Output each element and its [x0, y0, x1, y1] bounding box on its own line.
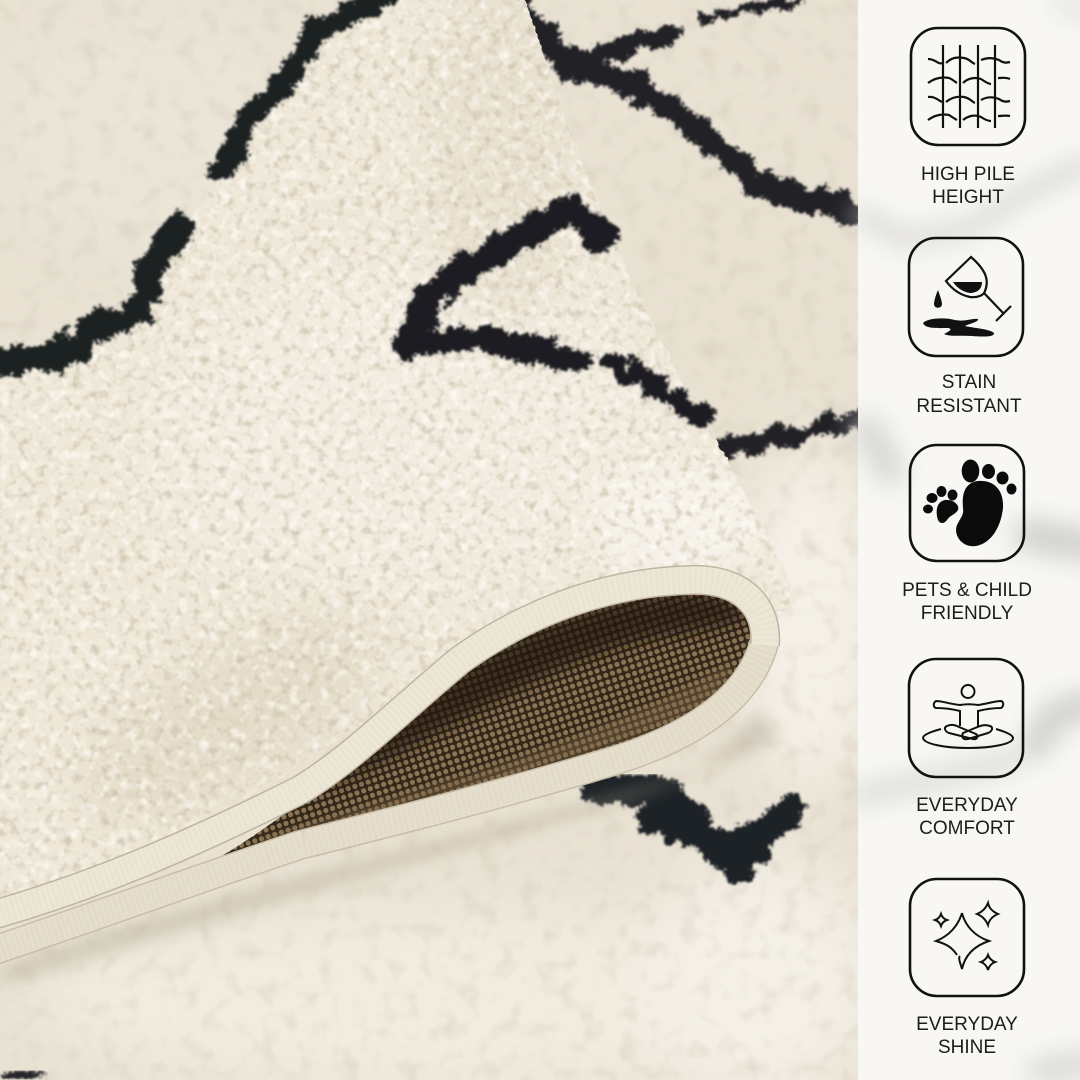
- feature: stain resistant: [909, 238, 1023, 417]
- rug floor background: [0, 0, 858, 1080]
- rug binding edge: [0, 580, 765, 953]
- icon: spilled wine glass: [909, 238, 1023, 356]
- label: everyday comfort: EVERYDAY: [916, 795, 1018, 816]
- flap pattern: curved mark: [404, 210, 704, 420]
- feature: everyday comfort: [909, 659, 1023, 839]
- icon: sparkles: [910, 879, 1024, 996]
- icon: paw and foot prints: [910, 445, 1024, 561]
- rug underside: [215, 585, 754, 860]
- label: high pile height: HEIGHT: [932, 187, 1004, 208]
- floor pile texture: [0, 0, 858, 1080]
- lower binding band: [0, 640, 765, 953]
- label: everyday shine: EVERYDAY: [916, 1014, 1018, 1035]
- label: pets and child friendly: PETS & CHILD: [902, 580, 1032, 601]
- label: everyday comfort: COMFORT: [919, 818, 1015, 839]
- underside inner shadow: [300, 592, 750, 800]
- floor pattern: bottom left mark: [5, 1072, 45, 1078]
- label: stain resistant: RESISTANT: [916, 396, 1022, 417]
- rug flap with shag pile: [0, 0, 800, 930]
- floor pattern: top right dark line: [525, 0, 860, 448]
- label: high pile height: HIGH PILE: [921, 164, 1015, 185]
- feature: high pile height: [911, 28, 1025, 208]
- floor pattern: lower dark mark: [596, 790, 790, 870]
- flap shading: [0, 0, 800, 930]
- shadow under the curl: [0, 710, 780, 985]
- soft light patches on floor: [66, 456, 858, 1080]
- feature: pets and child friendly: [902, 445, 1032, 624]
- upper binding band: [0, 580, 765, 917]
- flap pattern: long diagonal line: [0, 0, 385, 362]
- label: pets and child friendly: FRIENDLY: [921, 603, 1014, 624]
- label: everyday shine: SHINE: [938, 1037, 996, 1058]
- right feature panel: [858, 0, 1080, 1080]
- icon: high pile: [911, 28, 1025, 145]
- underside lower warm tone: [260, 660, 735, 850]
- feature: everyday shine: [910, 879, 1024, 1058]
- label: stain resistant: STAIN: [942, 372, 996, 393]
- panel background: [858, 0, 1080, 1080]
- faded rug pattern in panel: [862, 0, 1080, 1072]
- icon: seated meditation figure: [909, 659, 1023, 777]
